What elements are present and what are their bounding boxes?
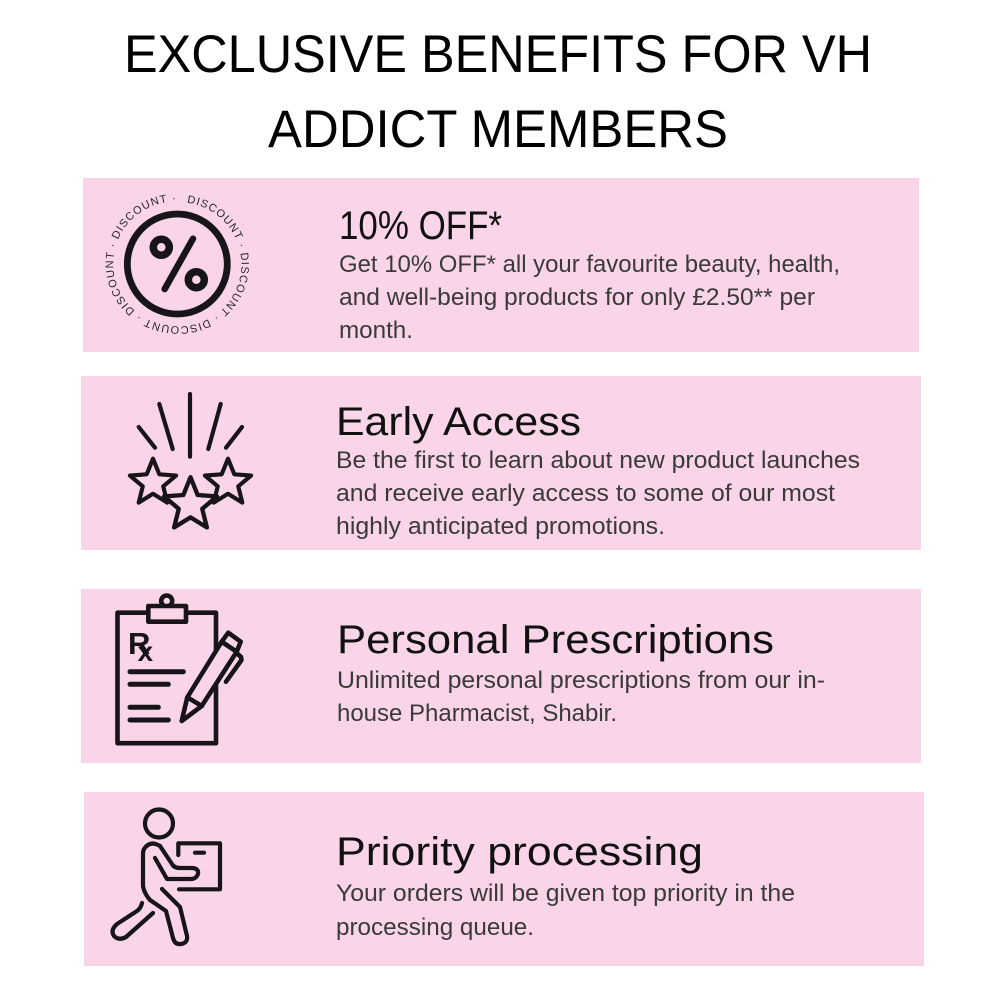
text: early access description: highly anticipated promotions. bbox=[336, 513, 665, 540]
heading: personal prescriptions: Personal Prescriptions bbox=[337, 618, 774, 662]
panel: personal prescriptions bbox=[81, 589, 921, 763]
icon: discount badge: DISCOUNT · DISCOUNT · DISCOUNT · DISCOUNT · DISCOUNT · bbox=[106, 194, 249, 334]
panel: priority processing bbox=[84, 792, 924, 966]
icon: clipboard with pen: R bbox=[128, 626, 150, 661]
text: 10% off description: and well-being products for only £2.50** per bbox=[339, 284, 815, 311]
text: priority processing description: processing queue. bbox=[336, 914, 534, 941]
icon: clipboard with pen bbox=[118, 596, 242, 743]
text: early access description: Be the first to learn about new product launches bbox=[336, 447, 860, 474]
text: 10% off description: month. bbox=[339, 317, 413, 344]
text: personal prescriptions description: Unlimited personal prescriptions from our in- bbox=[337, 667, 825, 694]
text: personal prescriptions description bbox=[337, 667, 825, 727]
icon: person carrying box bbox=[113, 810, 220, 944]
text: priority processing description: Your orders will be given top priority in the bbox=[336, 880, 795, 907]
title: ADDICT MEMBERS bbox=[268, 100, 728, 159]
heading: 10% off: 10% OFF* bbox=[339, 204, 502, 248]
panel: 10% off bbox=[83, 178, 919, 352]
icon: stars with rays bbox=[130, 394, 251, 527]
panel background bbox=[84, 792, 924, 966]
panel background bbox=[81, 589, 921, 763]
panel background bbox=[81, 376, 921, 550]
text: priority processing description bbox=[336, 880, 795, 941]
icon: clipboard with pen: x bbox=[138, 636, 154, 667]
text: early access description bbox=[336, 447, 860, 540]
text: 10% off description: Get 10% OFF* all your favourite beauty, health, bbox=[339, 251, 840, 278]
heading: early access: Early Access bbox=[336, 400, 581, 444]
heading: priority processing: Priority processing bbox=[336, 830, 703, 874]
text: early access description: and receive early access to some of our most bbox=[336, 480, 835, 507]
text: personal prescriptions description: house Pharmacist, Shabir. bbox=[337, 700, 617, 727]
panel: early access bbox=[81, 376, 921, 550]
text: 10% off description bbox=[339, 251, 840, 344]
title: EXCLUSIVE BENEFITS FOR VH bbox=[124, 25, 872, 84]
panel background bbox=[83, 178, 919, 352]
title bbox=[124, 25, 872, 159]
